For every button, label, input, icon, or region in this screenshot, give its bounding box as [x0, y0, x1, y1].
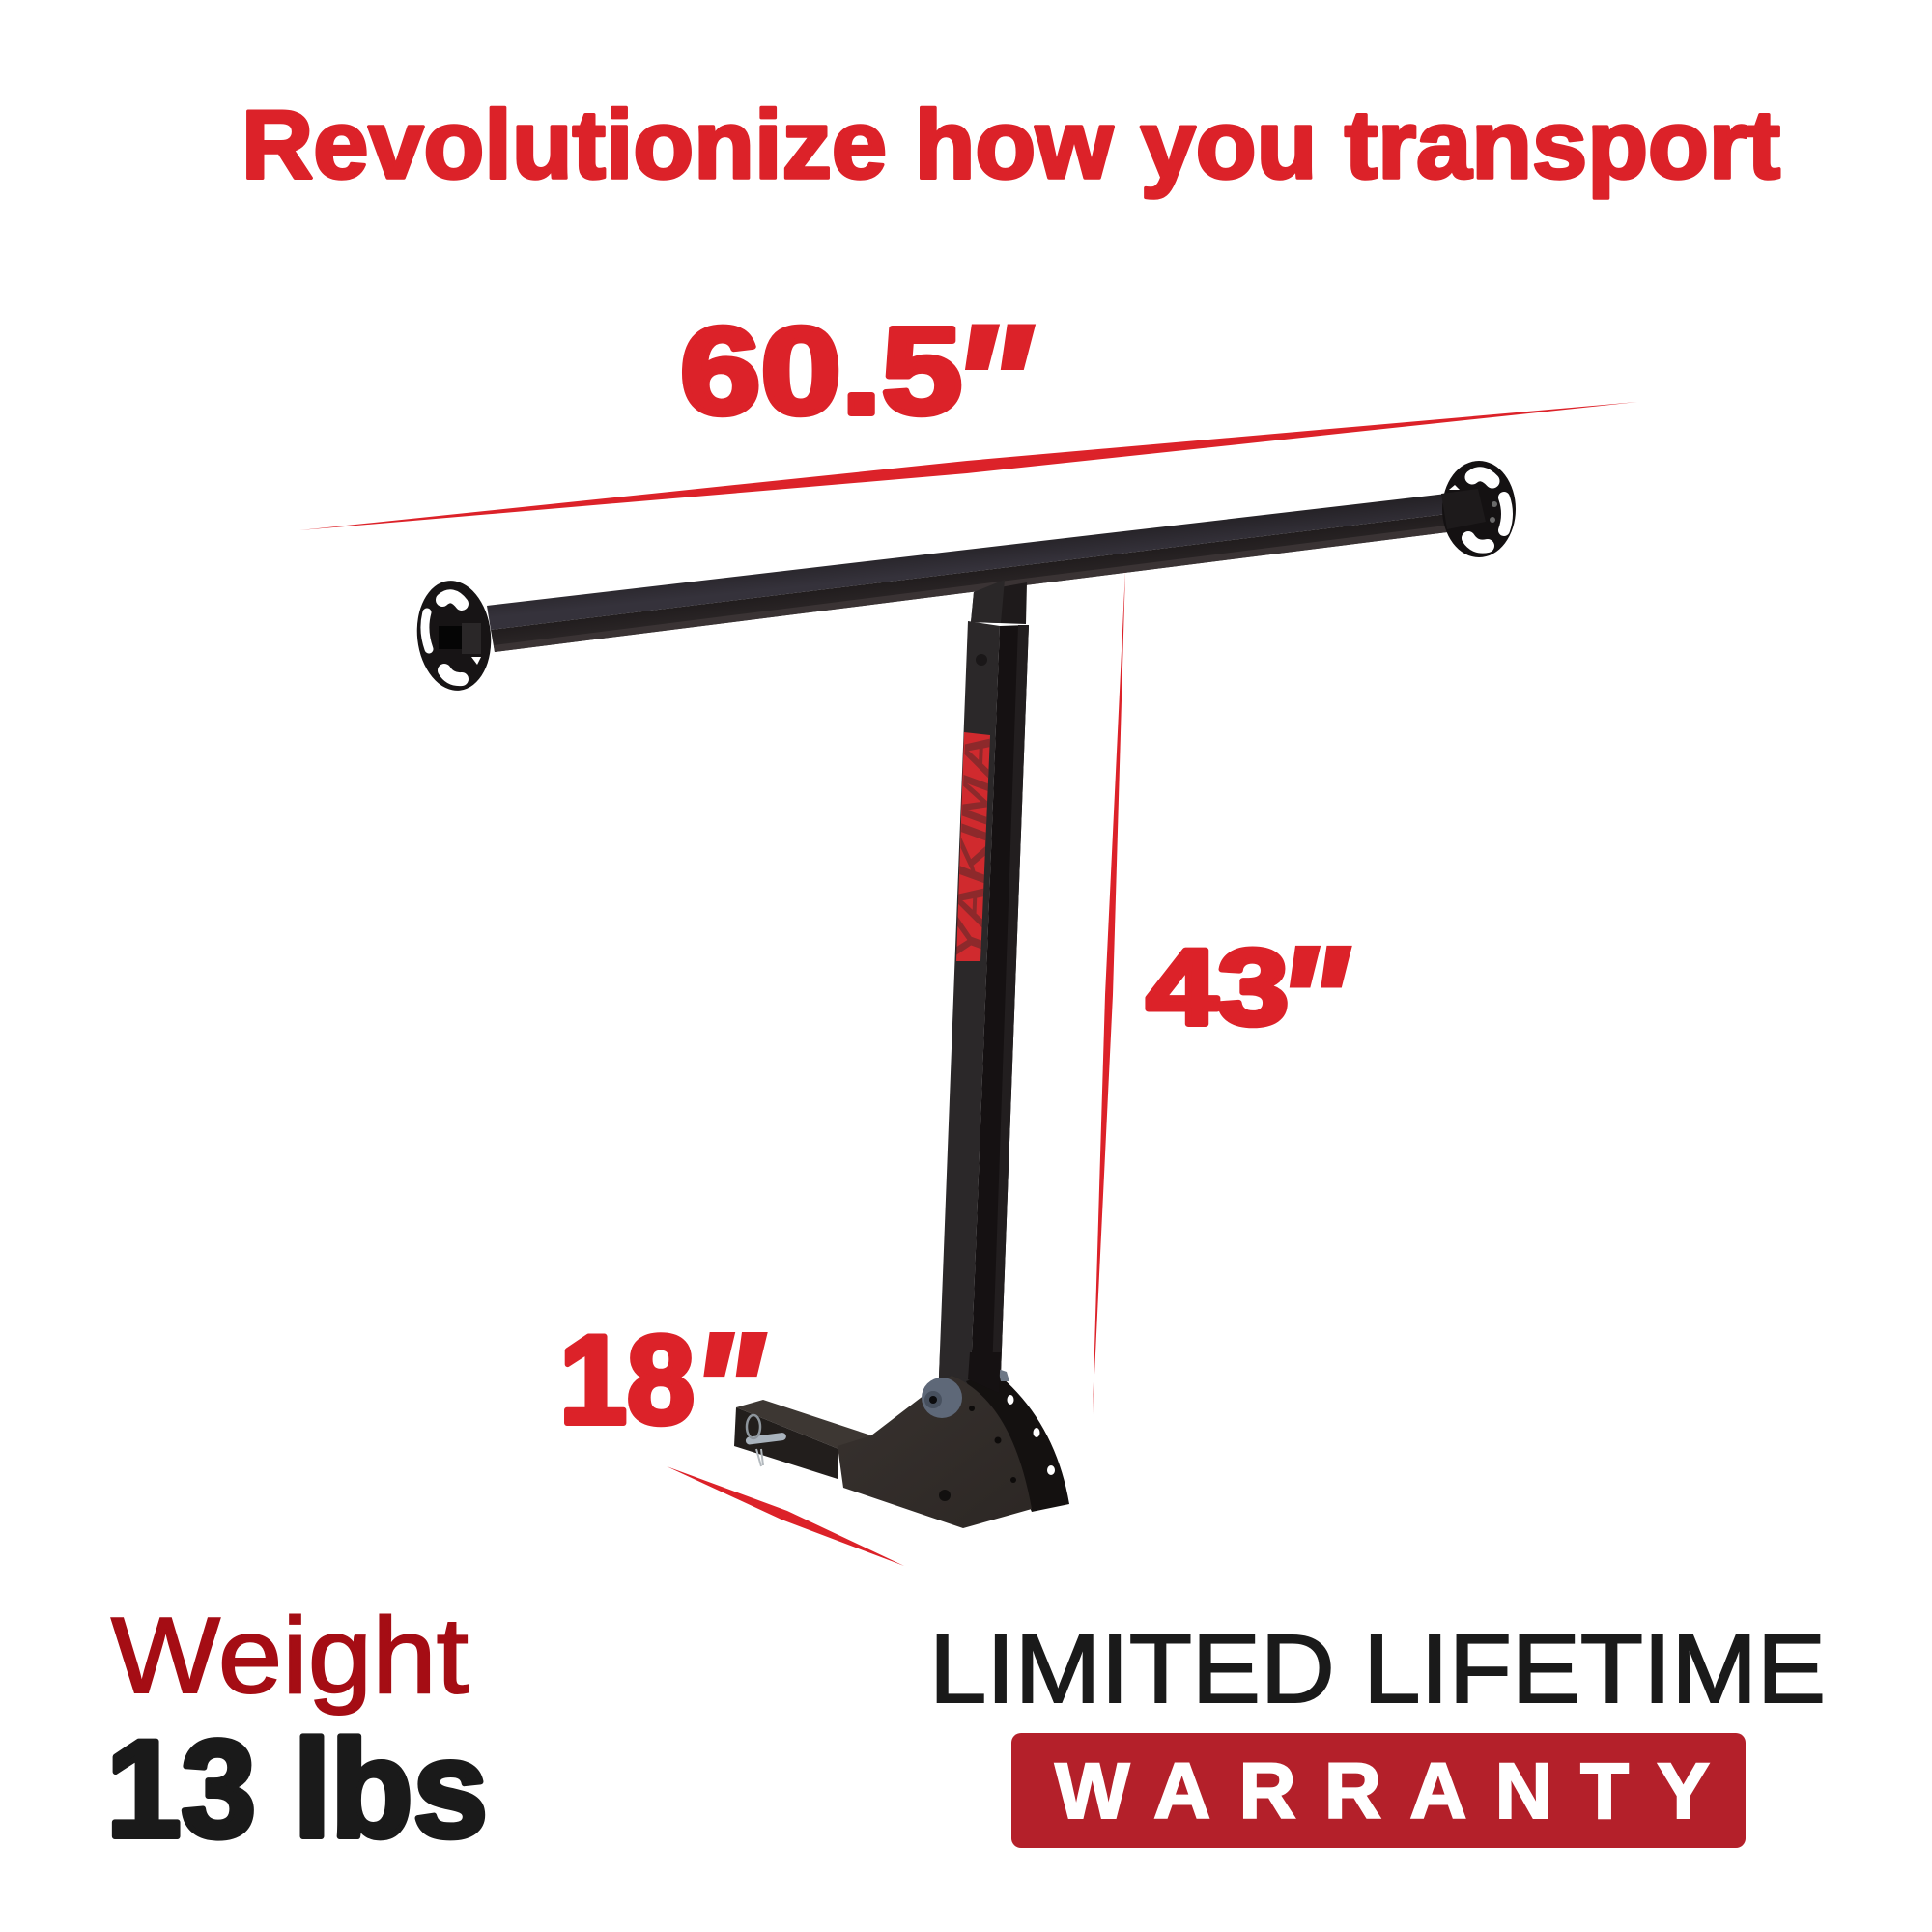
- warranty callout: [929, 1615, 1826, 1848]
- dimension: height 43 inches: 43: [1147, 927, 1289, 1047]
- upright post: [938, 580, 1029, 1401]
- adjustment knob: [922, 1378, 962, 1418]
- dimension: width 60.5 inches: 60.5: [680, 302, 962, 440]
- lower post in front of plate: [939, 1352, 1001, 1393]
- title: Revolutionize how you transport: [242, 91, 1780, 199]
- warranty heading: LIMITED LIFETIME: [929, 1615, 1826, 1723]
- hitch receiver tube: [734, 1400, 871, 1479]
- mount side plate: [838, 1376, 1032, 1528]
- crossbar: [487, 493, 1470, 652]
- dimension: depth 18 inches: [559, 1300, 904, 1566]
- right end disc: [1441, 461, 1516, 557]
- warranty badge: [1011, 1733, 1746, 1848]
- product: hitch-mounted T-bar rack: [412, 461, 1516, 1528]
- dimension: depth 18 inches: ": [690, 1300, 765, 1478]
- YAKIMA logo on post: [949, 732, 998, 961]
- dimension: width 60.5 inches: [299, 292, 1637, 530]
- dimension: width 60.5 inches: ": [950, 292, 1033, 475]
- weight label: Weight: [111, 1596, 469, 1716]
- weight spec: [106, 1596, 488, 1866]
- hitch pin: [747, 1415, 782, 1466]
- YAKIMA logo on post: YAKIMA: [949, 733, 998, 961]
- weight value: 13 lbs: [106, 1713, 488, 1866]
- mount rim: [966, 1369, 1069, 1512]
- dimension: height 43 inches: ": [1276, 916, 1350, 1083]
- left end disc: [412, 577, 497, 695]
- warranty badge: WARRANTY: [1055, 1747, 1710, 1835]
- dimension: height 43 inches: [1093, 570, 1350, 1414]
- dimension: depth 18 inches: 18: [559, 1309, 695, 1450]
